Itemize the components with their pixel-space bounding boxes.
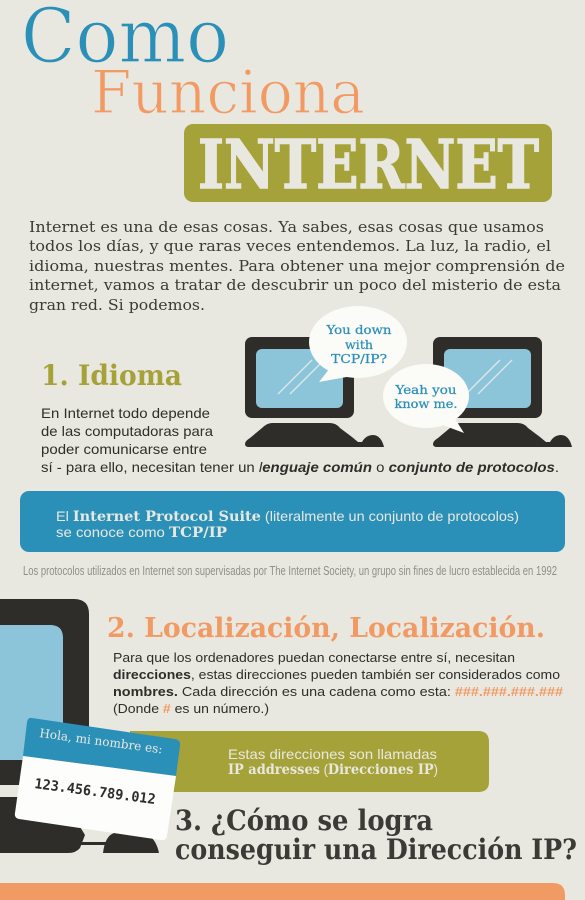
callout: IP addresses: IP addresses (Direcciones IP) bbox=[228, 761, 438, 778]
section 2 body text bbox=[113, 650, 564, 716]
title word: Funciona: Funciona bbox=[91, 58, 365, 128]
illustration: two computers talking bbox=[245, 306, 572, 447]
section 3 heading: 3. ¿Cómo se logra bbox=[175, 804, 433, 837]
speech bubble: Yeah you know me: Yeah you bbox=[394, 382, 456, 397]
section 1 body text: poder comunicarse entre bbox=[41, 441, 207, 457]
section 2 body text: (Donde # es un número.) bbox=[113, 701, 269, 716]
section 2 body text: nombres. Cada dirección es una cadena como esta: ###.###.###.### bbox=[113, 684, 564, 699]
section 2 body text: Para que los ordenadores puedan conectarse entre sí, necesitan bbox=[113, 650, 515, 665]
section 1 body text: de las computadoras para bbox=[41, 423, 213, 439]
name tag card bbox=[15, 718, 180, 840]
speech bubble: You down with TCP/IP: You down bbox=[325, 322, 392, 337]
intro paragraph: todos los días, y que raras veces entendemos. La luz, la radio, el bbox=[29, 237, 551, 255]
speech bubble: Yeah you know me bbox=[383, 364, 469, 433]
section 1 heading: 1. Idioma bbox=[41, 359, 182, 392]
section 1 body text bbox=[41, 405, 559, 475]
speech bubble: You down with TCP/IP: with bbox=[345, 337, 373, 352]
section 3 heading bbox=[175, 804, 577, 866]
intro paragraph: Internet es una de esas cosas. Ya sabes, esas cosas que usamos bbox=[29, 218, 544, 236]
orange panel top edge bbox=[0, 883, 565, 900]
title bbox=[21, 0, 552, 204]
callout: IP addresses bbox=[130, 731, 489, 792]
callout: IP addresses: Estas direcciones son llamadas bbox=[228, 746, 437, 762]
speech bubble: You down with TCP/IP: TCP/IP? bbox=[331, 351, 387, 366]
section 2 heading: 2. Localización, Localización. bbox=[107, 613, 545, 644]
section 1 body text: sí - para ello, necesitan tener un lenguaje común o conjunto de protocolos . bbox=[41, 459, 559, 475]
icon: left computer bbox=[245, 337, 384, 447]
name tag heading: Hola, mi nombre es: bbox=[39, 726, 163, 756]
intro paragraph: idioma, nuestras mentes. Para obtener una mejor comprensión de bbox=[29, 257, 565, 275]
callout: Internet Protocol Suite bbox=[20, 491, 565, 552]
intro paragraph: gran red. Si podemos. bbox=[29, 296, 205, 314]
speech bubble: Yeah you know me: know me. bbox=[394, 396, 458, 411]
callout: Internet Protocol Suite: El Internet Protocol Suite (literalmente un conjunto de protocolos) bbox=[56, 508, 519, 525]
intro paragraph: internet, vamos a tratar de descubrir un poco del misterio de esta bbox=[29, 276, 561, 294]
section 2 body text: direcciones , estas direcciones pueden también ser considerados como bbox=[113, 667, 560, 682]
callout: Internet Protocol Suite: se conoce como TCP/IP bbox=[56, 524, 228, 541]
speech bubble: You down with TCP/IP bbox=[309, 306, 407, 382]
icon: large computer bbox=[0, 599, 159, 853]
section 1 body text: En Internet todo depende bbox=[41, 405, 210, 421]
intro paragraph bbox=[29, 218, 565, 314]
icon: right computer bbox=[433, 337, 572, 447]
name tag number: 123.456.789.012 bbox=[33, 776, 157, 808]
